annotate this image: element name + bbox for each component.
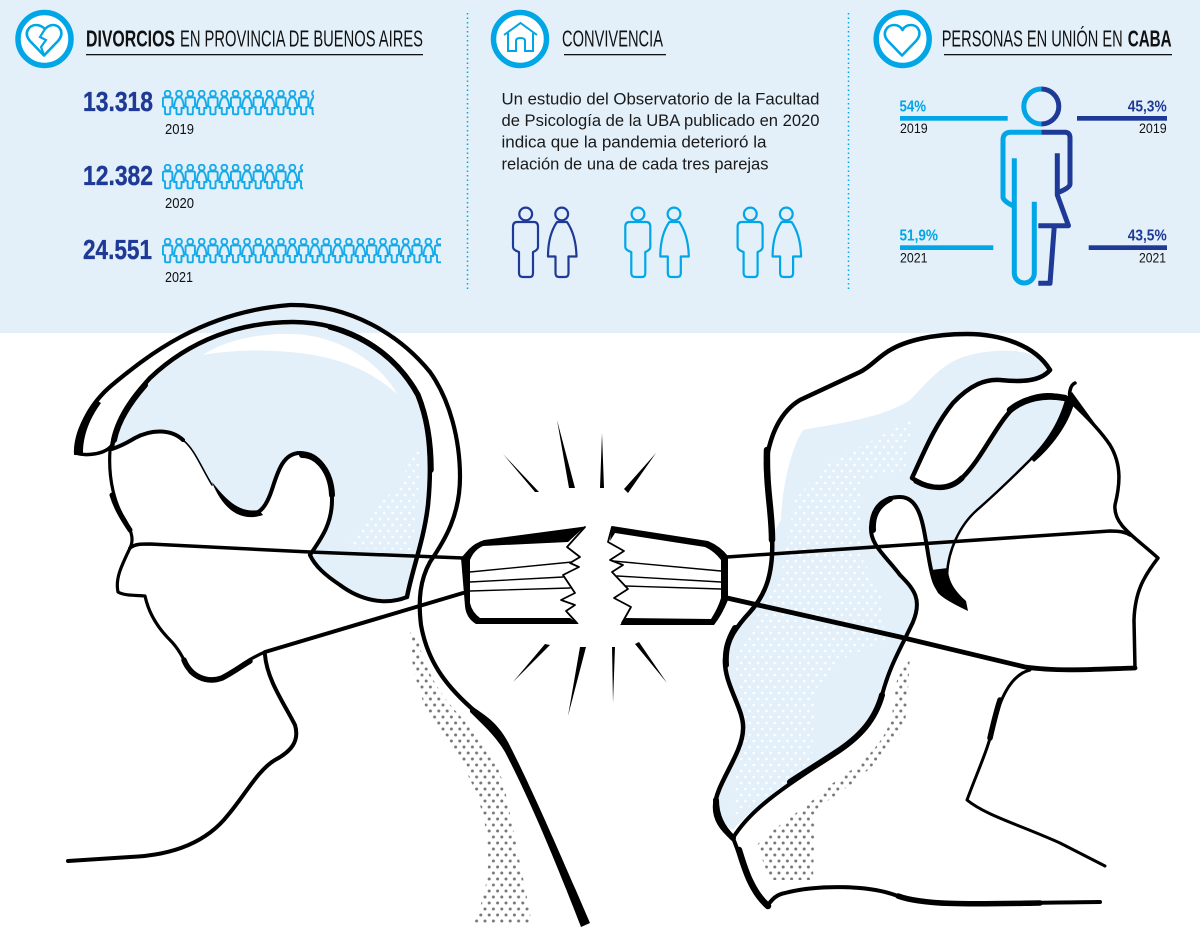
- stat: women 2021: [900, 228, 993, 266]
- woman hair dots: [735, 420, 912, 815]
- woman mask straps: [727, 531, 1135, 670]
- man halftone shadow: [410, 625, 532, 925]
- woman hair fill: [716, 351, 1070, 830]
- panel: convivencia: [494, 12, 820, 277]
- half man half woman figure: [1003, 89, 1070, 283]
- man face: [110, 450, 265, 680]
- man ear: [258, 453, 332, 555]
- man inner hair: [112, 322, 431, 597]
- heading: divorcios: DIVORCIOS: [86, 26, 175, 52]
- broken mask: left half: [461, 526, 585, 624]
- woman hair lock: [931, 396, 1074, 611]
- man hair fill: [112, 322, 430, 601]
- stat: men 2021: [1089, 228, 1167, 266]
- row: 2020: 12.382: [83, 160, 153, 191]
- stat: men 2019: [1077, 98, 1167, 136]
- man sideburn: [112, 432, 263, 517]
- heading: divorcios: EN PROVINCIA DE BUENOS AIRES: [180, 26, 423, 52]
- woman fringe loop: [912, 370, 1070, 488]
- row: 2021: [83, 234, 441, 286]
- couple: navy: [513, 208, 576, 277]
- heading: personas en union: CABA: [1128, 26, 1172, 52]
- row: 2020: 2020: [165, 195, 194, 212]
- stat: women 2019: [900, 98, 1008, 136]
- text block: indica que la pandemia deterioró la: [502, 134, 767, 152]
- stat: women 2021: 2021: [900, 250, 928, 266]
- row: 2019: [83, 86, 314, 138]
- panel: personas en union: [876, 12, 1172, 283]
- man nape hair: [310, 555, 407, 601]
- row: 2019: 2019: [165, 121, 194, 138]
- man hair highlight: [203, 334, 397, 394]
- stat: men 2021: 43,5%: [1128, 228, 1167, 244]
- stat: men 2019: 2019: [1139, 120, 1167, 136]
- man hair dots: [345, 445, 420, 550]
- text block: Un estudio del Observatorio de la Facultad: [502, 90, 820, 108]
- row: 2019: 13.318: [83, 86, 153, 117]
- woman halftone shadow: [757, 655, 910, 880]
- heading: convivencia: [562, 26, 666, 55]
- broken mask: right half: [608, 526, 728, 625]
- man mask straps: [130, 544, 463, 652]
- text block: de Psicología de la UBA publicado en 2020: [502, 112, 820, 130]
- text block: relación de una de cada tres parejas: [502, 156, 768, 174]
- text block: [502, 90, 820, 174]
- man fringe: [74, 400, 112, 455]
- man neck: [68, 655, 296, 861]
- illustration: woman head: [715, 334, 1158, 906]
- woman neck: [967, 670, 1105, 866]
- icon: heart: [876, 12, 929, 66]
- stat: men 2021: 2021: [1139, 250, 1166, 266]
- illustration: man head: [68, 305, 590, 927]
- heading: divorcios: [86, 26, 423, 55]
- stat: women 2019: 2019: [900, 120, 928, 136]
- couple: blue 2: [738, 208, 801, 277]
- woman chin line and base: [733, 838, 1100, 906]
- stat: women 2021: 51,9%: [900, 228, 938, 244]
- man outer hair and back: [76, 305, 477, 713]
- header band: [0, 0, 1200, 333]
- burst lines: [503, 420, 667, 716]
- stat: men 2019: 45,3%: [1128, 98, 1167, 116]
- woman outer hair: [715, 334, 1050, 838]
- panel: divorcios: [18, 12, 441, 286]
- row: 2021: 2021: [165, 269, 193, 286]
- woman back hair and ear: [733, 497, 947, 838]
- heading: convivencia: CONVIVENCIA: [562, 26, 663, 52]
- woman face: [1066, 383, 1158, 668]
- row: 2021: 24.551: [83, 234, 152, 265]
- stat: women 2019: 54%: [900, 98, 926, 116]
- icon: house: [494, 12, 546, 66]
- couple: blue 1: [625, 208, 689, 277]
- icon: broken heart: [18, 12, 71, 66]
- row: 2020: [83, 160, 303, 212]
